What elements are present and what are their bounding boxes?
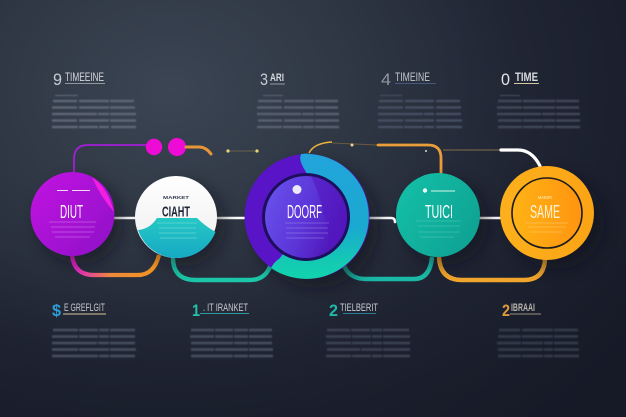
connector: white horizontal segments: [112, 218, 502, 222]
heading: bottom four: 2: [502, 301, 510, 320]
panel: circle one, DIUT: [30, 172, 114, 256]
heading: SAME: [530, 202, 560, 222]
heading: bottom two: . IT IRANKET: [203, 302, 248, 314]
connector: orange under curve right: [439, 257, 545, 280]
panel: circle two, CIAHT: [135, 176, 217, 258]
fold highlight: [92, 177, 114, 212]
heading: bottom one: [52, 301, 106, 320]
heading: bottom three: [329, 301, 378, 320]
connector: small tan line with end dots: [226, 149, 259, 153]
text lines: [416, 221, 461, 237]
shadows: [38, 164, 604, 288]
text block: top one: [52, 96, 136, 127]
heading: bottom one: E GREFLGIT: [64, 302, 105, 314]
heading: top three: 4: [381, 70, 391, 89]
heading: top one: 9: [53, 70, 62, 89]
icon: magenta dot one: [146, 139, 162, 155]
icon: magenta dot two: [168, 138, 186, 156]
small label: MARKET: [163, 195, 189, 200]
text lines: [49, 222, 96, 237]
connector: purple line to magenta dots: [74, 139, 162, 172]
connector: teal under curve right: [344, 257, 432, 279]
text block: top two: [257, 96, 339, 127]
heading: top two: 3: [260, 70, 268, 89]
panel: circle five, SAME: [500, 166, 594, 260]
connector: yellow arc and orange top line to teal circle: [309, 142, 441, 174]
text lines: [526, 223, 568, 232]
text lines: [285, 223, 329, 238]
heading: CIAHT: [162, 204, 190, 220]
dashes: [57, 190, 90, 192]
heading: bottom three: TIELBERIT: [340, 302, 378, 314]
heading: top one: [53, 70, 105, 89]
heading: top three: [381, 70, 436, 89]
connector: orange stub: [186, 147, 211, 154]
text block: top four: [497, 96, 580, 127]
heading: bottom two: 1: [192, 301, 200, 320]
icon: white dot: [292, 185, 302, 194]
small label: MAKER: [538, 195, 553, 200]
panel: central circle, DOORF: [244, 154, 370, 279]
panel: circle four, TUICI: [396, 173, 480, 257]
heading: TUICI: [425, 202, 453, 222]
heading: bottom three: 2: [329, 301, 338, 320]
connector: magenta to orange under curve: [72, 255, 159, 275]
heading: top four: [501, 70, 539, 89]
heading: bottom one: $: [52, 301, 62, 320]
inner dark ring: [262, 173, 350, 261]
heading: bottom four: [502, 301, 541, 320]
inner disc: [265, 176, 347, 258]
heading: bottom four: IBRAAI: [511, 302, 535, 314]
heading: top four: TIME: [515, 72, 538, 84]
text block: bottom two: [190, 330, 273, 356]
heading: DIUT: [60, 202, 83, 222]
heading: top two: [260, 70, 285, 89]
outer purple disc: [244, 154, 370, 279]
teal crescent: [271, 154, 369, 279]
heading: top four: 0: [501, 70, 510, 89]
heading: top three: TIMEINE: [395, 72, 430, 84]
text lines: [157, 223, 197, 238]
text block: bottom one: [52, 330, 136, 356]
heading: bottom two: [192, 301, 249, 320]
connector: teal under curve left: [173, 258, 271, 280]
teal wave: [138, 218, 216, 258]
text block: bottom four: [497, 330, 579, 356]
icon: white dot and bar: [423, 188, 427, 193]
heading: top two: ARI: [270, 72, 284, 84]
heading: top one: TIMEEINE: [65, 72, 104, 84]
text block: top three: [378, 96, 462, 127]
heading: DOORF: [287, 202, 322, 222]
connector: dark and white line to orange circle: [443, 150, 540, 166]
text block: bottom three: [326, 330, 410, 356]
